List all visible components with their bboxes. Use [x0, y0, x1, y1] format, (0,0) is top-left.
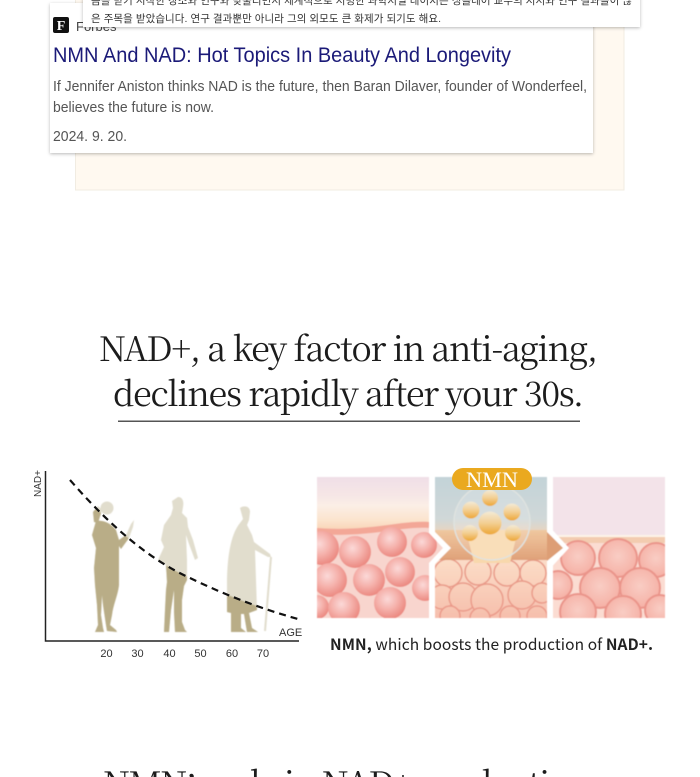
age ticks: 50	[194, 648, 207, 660]
panel: NMN absorption	[434, 476, 548, 619]
article date: 2024. 9. 20.	[53, 128, 127, 145]
icon: Forbes logo	[53, 17, 69, 34]
Forbes source name: Forbes	[76, 19, 117, 34]
caption: NMN, which boosts the production of NAD+.	[330, 633, 653, 655]
label: NMN pill	[452, 467, 532, 492]
article summary: If Jennifer Aniston thinks NAD is the future, then Baran Dilaver, founder of Wonderfeel,	[53, 78, 587, 95]
article summary	[53, 78, 587, 116]
age ticks: 70	[257, 648, 269, 660]
panel: beige background card	[76, 0, 624, 190]
arrow: into restored skin	[547, 524, 569, 572]
age ticks	[100, 648, 269, 660]
chart: NAD+ level by age	[33, 470, 302, 660]
panel: restored skin	[552, 476, 666, 619]
silhouettes: three women at different ages	[92, 497, 271, 632]
panel: Korean article card	[83, 0, 640, 27]
axes	[46, 471, 299, 641]
heading: NAD+ decline	[99, 322, 598, 422]
age ticks: 20	[100, 648, 113, 660]
age ticks: 60	[226, 648, 238, 660]
illustration: skin cells before and after NMN	[316, 476, 666, 619]
panel: aged skin	[316, 476, 443, 619]
icon: Forbes logo: F	[57, 19, 65, 34]
article summary: believes the future is now.	[53, 99, 214, 116]
x axis label: AGE	[279, 627, 302, 639]
panel: Forbes article card	[50, 3, 593, 153]
decline curve	[70, 480, 298, 619]
age ticks: 30	[131, 648, 144, 660]
Korean article text: 은 주목을 받았습니다. 연구 결과뿐만 아니라 그의 외모도 큰 화제가 되기도 해요.	[91, 12, 441, 25]
age ticks: 40	[163, 648, 176, 660]
y axis label: NAD+	[33, 470, 44, 497]
white chevron	[429, 526, 451, 570]
label: NMN pill: NMN	[466, 467, 518, 492]
article title: NMN And NAD: Hot Topics In Beauty And Longevity	[53, 44, 511, 67]
heading: NAD+ decline: declines rapidly after your 30s.	[113, 367, 584, 416]
heading: NAD+ decline: NAD+, a key factor in anti-aging,	[99, 322, 598, 371]
